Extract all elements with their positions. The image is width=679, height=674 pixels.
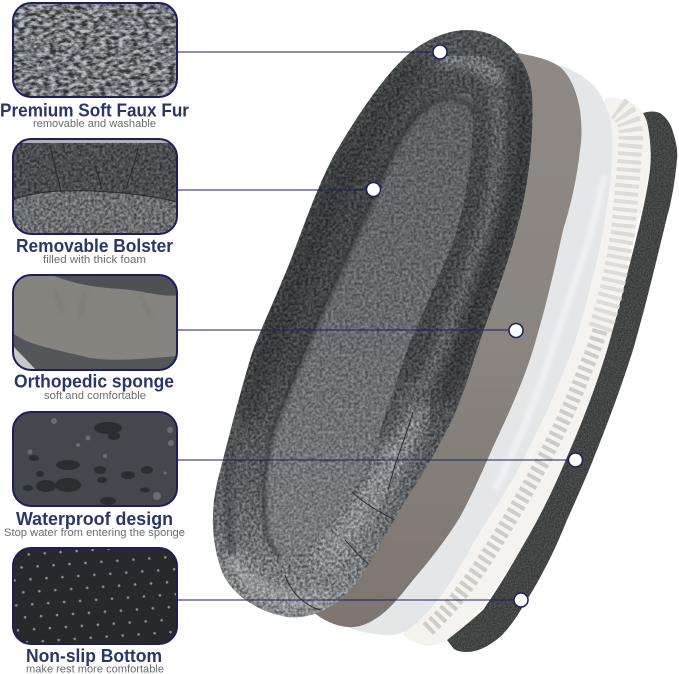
- heading: Waterproof design: [16, 508, 173, 529]
- caption: removable and washable: [33, 118, 156, 130]
- layer: faux fur bolster and bed: [205, 25, 540, 625]
- thumbnail: water droplets: [12, 411, 178, 507]
- callout 3: orthopedic sponge: [12, 274, 523, 402]
- leader line: [178, 329, 510, 331]
- inner sleeping surface: [260, 90, 475, 565]
- inner rim shadow: [264, 98, 473, 555]
- caption: soft and comfortable: [44, 390, 146, 402]
- marker dot: [366, 182, 380, 196]
- marker dot: [509, 324, 523, 338]
- thumbnail: bolster: [12, 138, 178, 236]
- marker dot: [433, 45, 447, 59]
- heading: Premium Soft Faux Fur: [0, 100, 189, 120]
- thumbnail: faux fur: [12, 2, 178, 98]
- caption: Stop water from entering the sponge: [4, 527, 185, 539]
- heading: Removable Bolster: [16, 235, 173, 256]
- callout 1: premium soft faux fur: [0, 2, 447, 130]
- marker dot: [568, 453, 582, 467]
- product: layered bed exploded view: [205, 25, 679, 655]
- heading: Orthopedic sponge: [14, 370, 174, 392]
- callout 2: removable bolster: [12, 138, 380, 266]
- callout 4: waterproof design: [4, 411, 582, 539]
- thumbnail: non-slip dots: [12, 547, 178, 645]
- layer: white egg-crate foam: [403, 98, 650, 646]
- thumbnail: sponge: [12, 274, 178, 372]
- caption: filled with thick foam: [43, 254, 146, 266]
- layer: taupe orthopedic sponge: [313, 50, 582, 627]
- marker dot: [514, 593, 528, 607]
- leader line: [178, 189, 367, 191]
- heading: Non-slip Bottom: [26, 645, 162, 666]
- layer: non-slip black bottom: [440, 105, 679, 655]
- leader line: [178, 599, 515, 601]
- leader line: [178, 51, 434, 53]
- layer: white waterproof cover: [350, 60, 612, 635]
- leader line: [178, 459, 569, 461]
- callout 5: non-slip bottom: [12, 547, 528, 674]
